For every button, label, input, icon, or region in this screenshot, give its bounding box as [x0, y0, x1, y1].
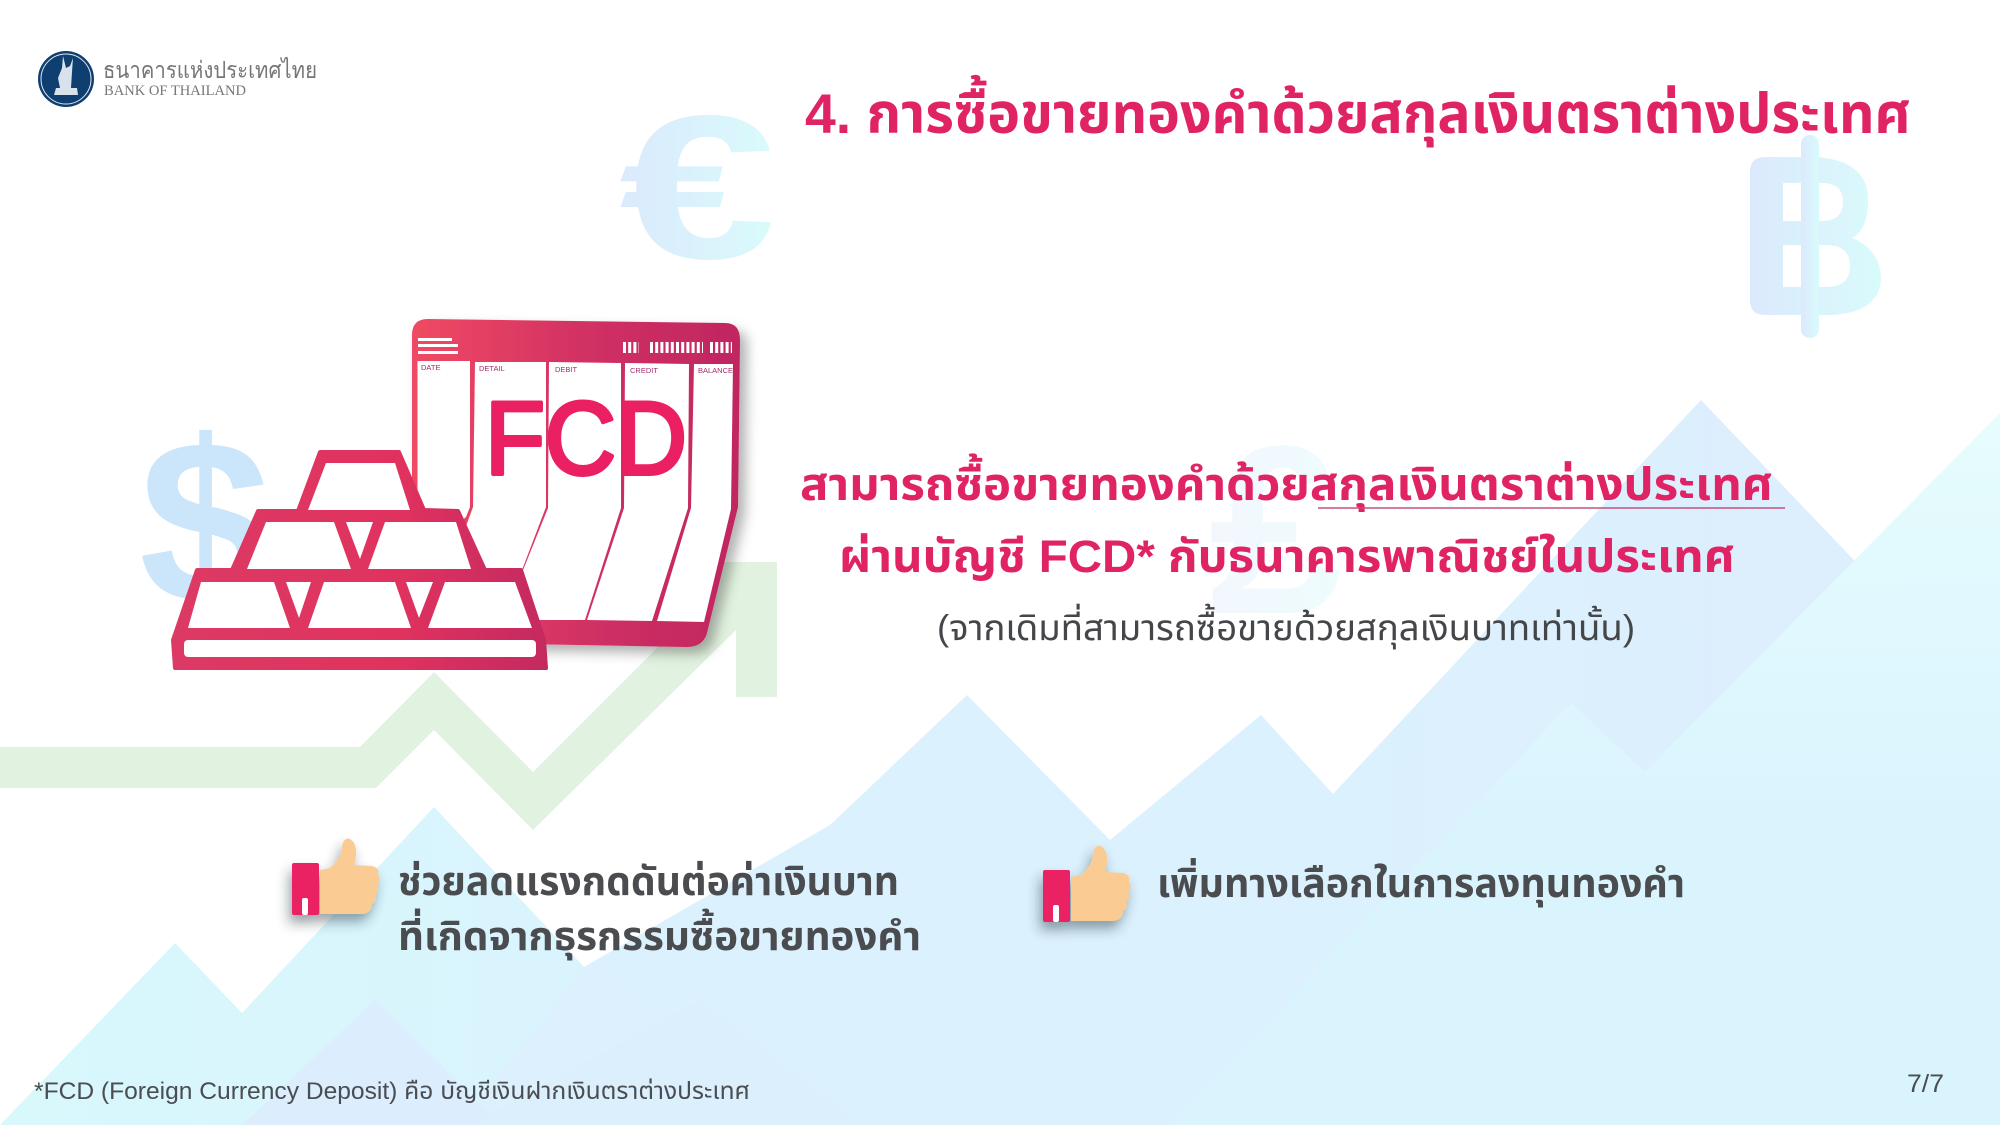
icon: thumbs up — [1043, 846, 1131, 922]
logo: Bank of Thailand — [38, 51, 317, 107]
icon: bank statement card FCD: CREDIT — [630, 366, 658, 375]
background mountains — [0, 400, 2000, 1125]
logo: Bank of Thailand: ธนาคารแห่งประเทศไทย — [103, 57, 317, 84]
icon: bank statement card FCD: DETAIL — [479, 364, 505, 373]
page number: 7/7 — [1907, 1070, 1944, 1098]
icon: bank statement card FCD: DEBIT — [555, 365, 578, 374]
background dollar symbol: $ — [139, 393, 271, 652]
main statement: ผ่านบัญชี FCD* กับธนาคารพาณิชย์ในประเทศ — [839, 531, 1735, 582]
benefit 1 with thumbs up: ที่เกิดจากธุรกรรมซื้อขายทองคำ — [398, 908, 921, 961]
main statement — [800, 453, 1785, 649]
icon: bank statement card FCD: DATE — [421, 363, 440, 372]
benefit 1 with thumbs up — [292, 839, 921, 961]
logo: Bank of Thailand: BANK OF THAILAND — [104, 83, 246, 99]
title: 4. การซื้อขายทองคำด้วยสกุลเงินตราต่างประเทศ — [805, 74, 1911, 148]
benefit 2 with thumbs up: เพิ่มทางเลือกในการลงทุนทองคำ — [1157, 857, 1685, 908]
background euro symbol: € — [619, 73, 776, 302]
benefit 2 with thumbs up — [1043, 846, 1685, 922]
main statement: สามารถซื้อขายทองคำด้วยสกุลเงินตราต่างประเทศ — [800, 453, 1773, 512]
benefit 1 with thumbs up: ช่วยลดแรงกดดันต่อค่าเงินบาท — [398, 859, 899, 904]
footnote: *FCD (Foreign Currency Deposit) คือ บัญชีเงินฝากเงินตราต่างประเทศ — [34, 1077, 750, 1105]
background green arrow — [0, 562, 777, 830]
icon: bank statement card FCD — [412, 319, 740, 647]
icon: stacked gold bars — [173, 452, 546, 668]
background pound symbol: £ — [1209, 396, 1342, 664]
FCD label: FCD — [485, 381, 687, 497]
main statement: (จากเดิมที่สามารถซื้อขายด้วยสกุลเงินบาทเท่านั้น) — [937, 603, 1635, 649]
icon: bank statement card FCD: BALANCE — [698, 366, 733, 375]
background baht symbol — [1750, 135, 1881, 338]
icon: thumbs up — [292, 839, 380, 915]
